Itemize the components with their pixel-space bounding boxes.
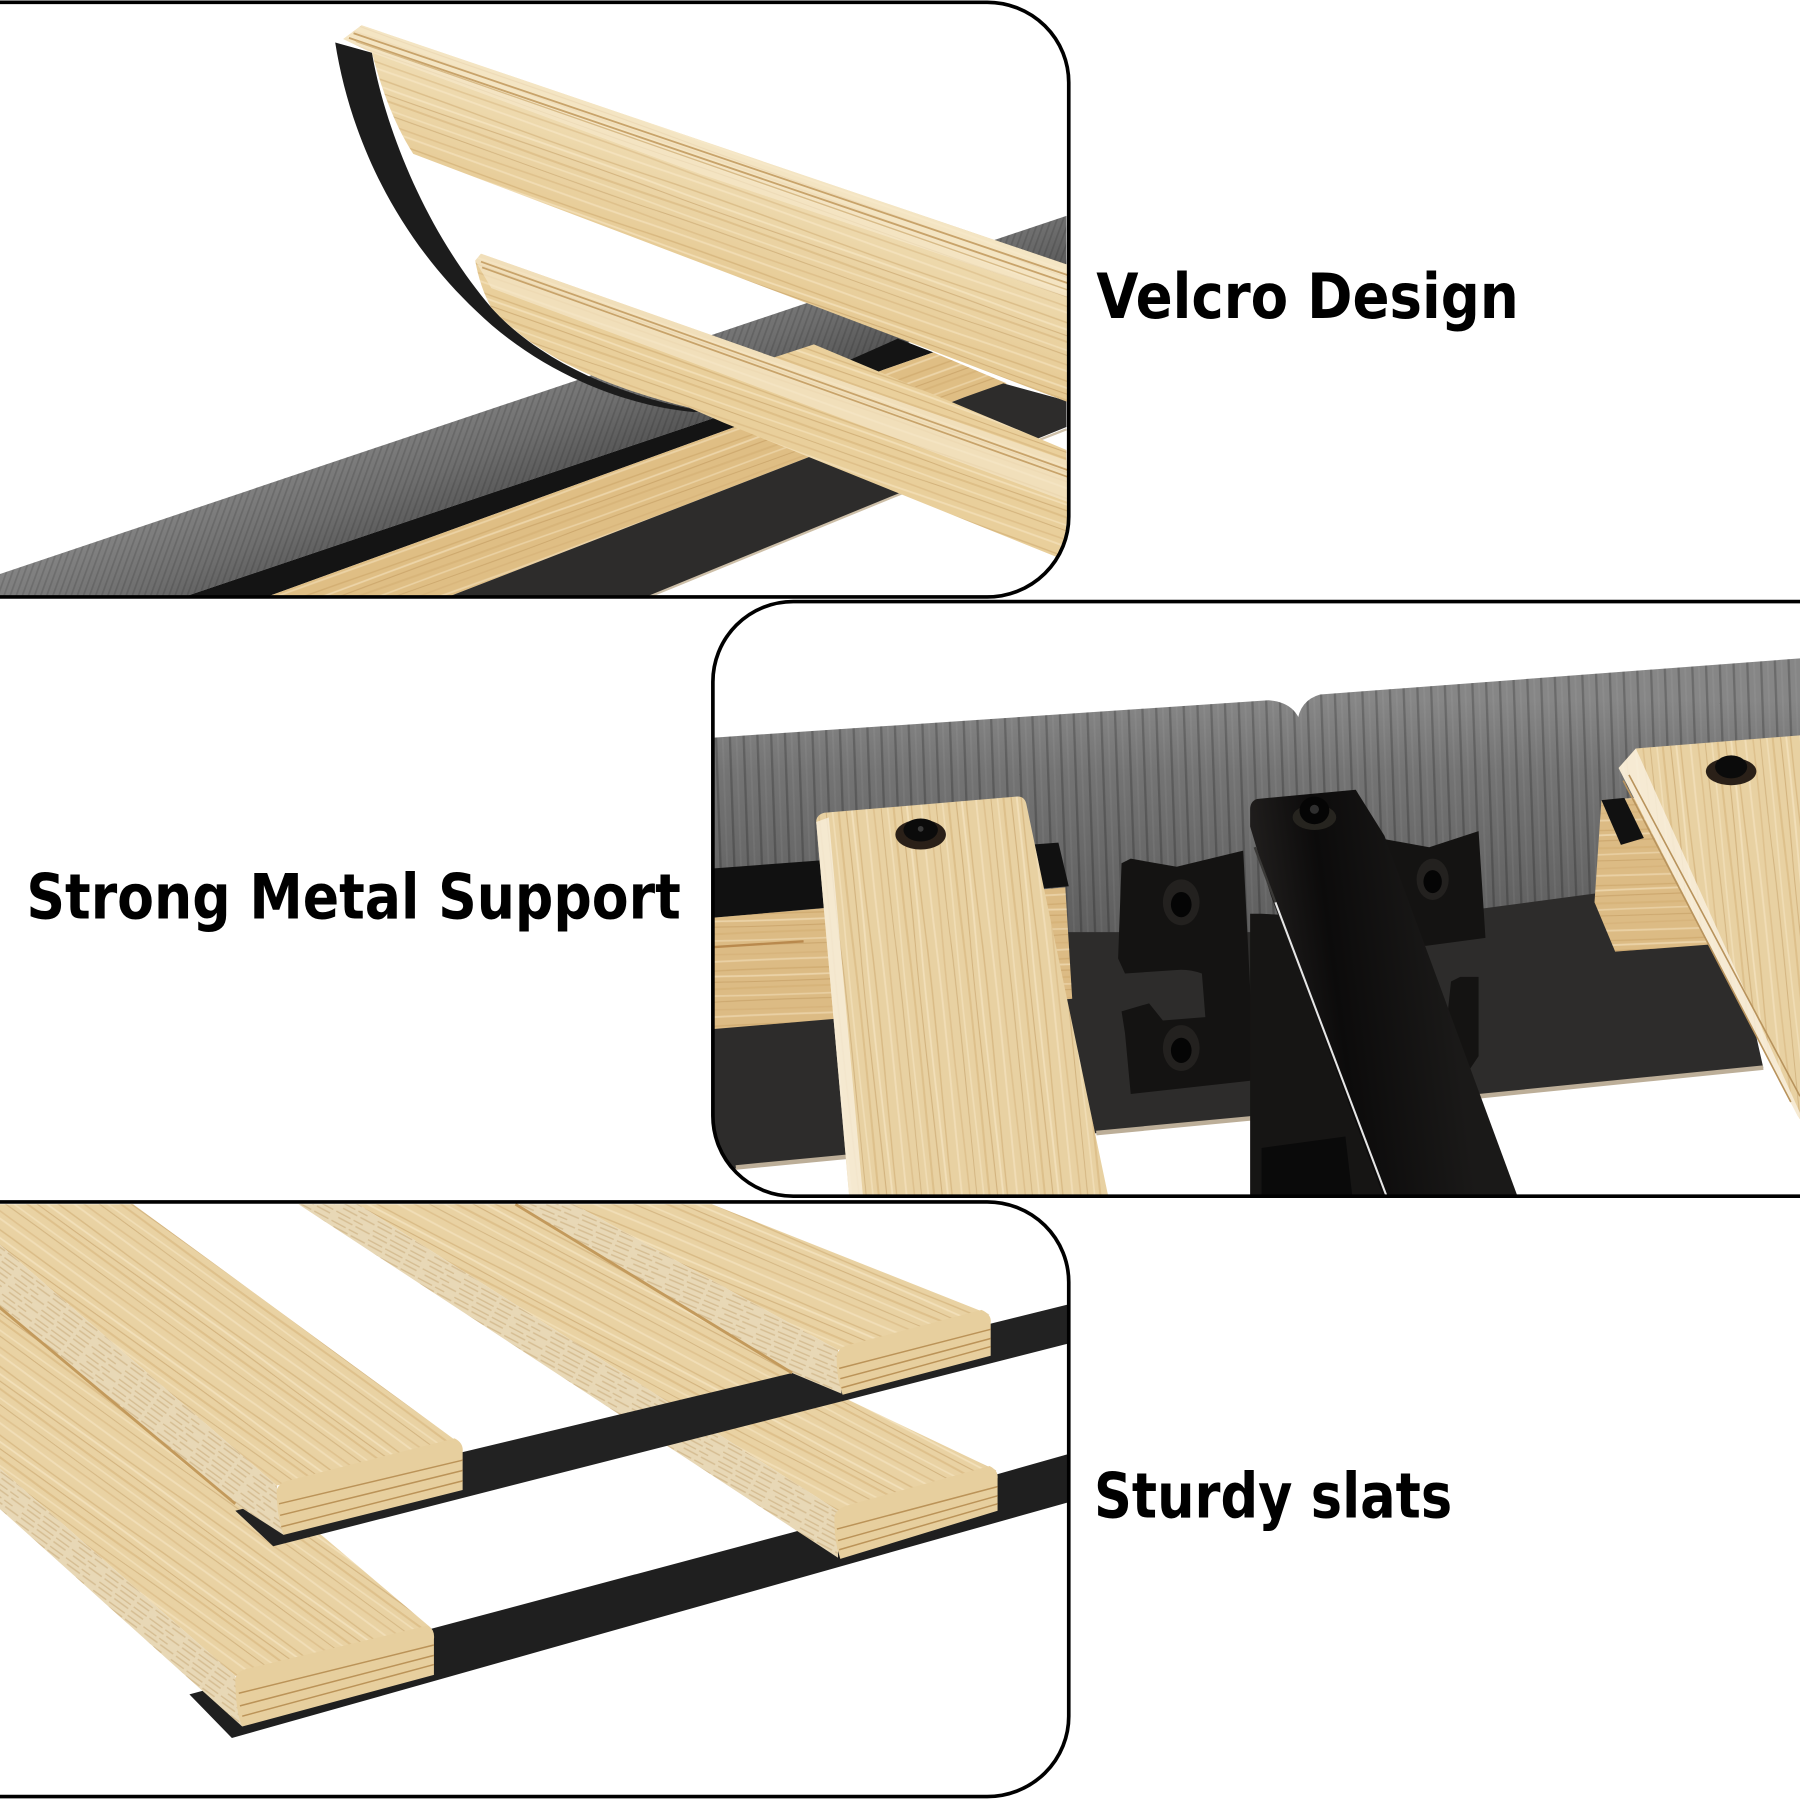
upholstered grey side rail — [0, 216, 1066, 597]
second lifted wood slat — [475, 254, 1079, 568]
wood shadow line — [515, 1204, 792, 1373]
front end — [235, 1626, 434, 1727]
dark fabric base — [448, 383, 1066, 597]
side face — [298, 1204, 838, 1558]
panel: velcro design photo — [0, 2, 1079, 597]
side face — [0, 1240, 284, 1535]
wood slat right — [1619, 735, 1800, 1131]
grey cushion right — [1297, 658, 1800, 932]
panel outline — [713, 602, 1800, 1196]
black strip left — [706, 843, 1069, 918]
black strip right — [1601, 798, 1644, 845]
right metal bracket — [1384, 831, 1485, 1077]
fixed wood ledger — [266, 352, 1007, 597]
panel: sturdy slats photo — [0, 1202, 1079, 1797]
front end — [834, 1466, 998, 1559]
black velcro strap — [335, 42, 703, 412]
left metal bracket — [1118, 851, 1255, 1094]
top face — [0, 1204, 463, 1485]
flat wood slat behind — [774, 344, 1066, 460]
fabric light edge — [649, 429, 1066, 597]
side face — [515, 1204, 841, 1394]
panel outline — [0, 1202, 1069, 1797]
wood shadow line — [0, 1303, 235, 1504]
slat R2 long middle — [298, 1204, 998, 1559]
front end — [837, 1310, 991, 1395]
wood slat front — [816, 797, 1109, 1200]
heading: Strong Metal Support: Strong Metal Support — [26, 860, 681, 933]
black inner rail strip — [184, 339, 933, 597]
heading: Velcro Design: Velcro Design — [1096, 260, 1519, 333]
wood block right — [1594, 798, 1710, 952]
metal beam — [1250, 790, 1519, 1200]
right slat bolt — [1706, 755, 1756, 785]
top face — [358, 1204, 996, 1511]
beam bolt — [1293, 797, 1336, 830]
fabric plywood edge — [736, 1068, 1763, 1167]
leg joint shadow — [1262, 1136, 1352, 1196]
dark fabric base — [700, 884, 1763, 1169]
lifted wood slat — [343, 25, 1079, 406]
top face — [574, 1204, 990, 1350]
slat bolt — [895, 818, 946, 849]
panel: metal support photo — [700, 602, 1800, 1200]
heading: Sturdy slats: Sturdy slats — [1094, 1460, 1452, 1533]
slat L2 upper left — [0, 1204, 463, 1535]
top face — [0, 1303, 434, 1676]
panel outline — [0, 2, 1069, 597]
slat L1 lower left — [0, 1303, 434, 1727]
grey cushion left — [706, 700, 1305, 932]
metal centre leg — [1250, 914, 1395, 1196]
wood block left — [706, 887, 1072, 1030]
slat R1 back right — [515, 1204, 991, 1395]
upper steel strap — [235, 1302, 1079, 1546]
front end — [277, 1438, 463, 1535]
side face — [0, 1464, 242, 1727]
lower steel strap — [189, 1451, 1079, 1738]
